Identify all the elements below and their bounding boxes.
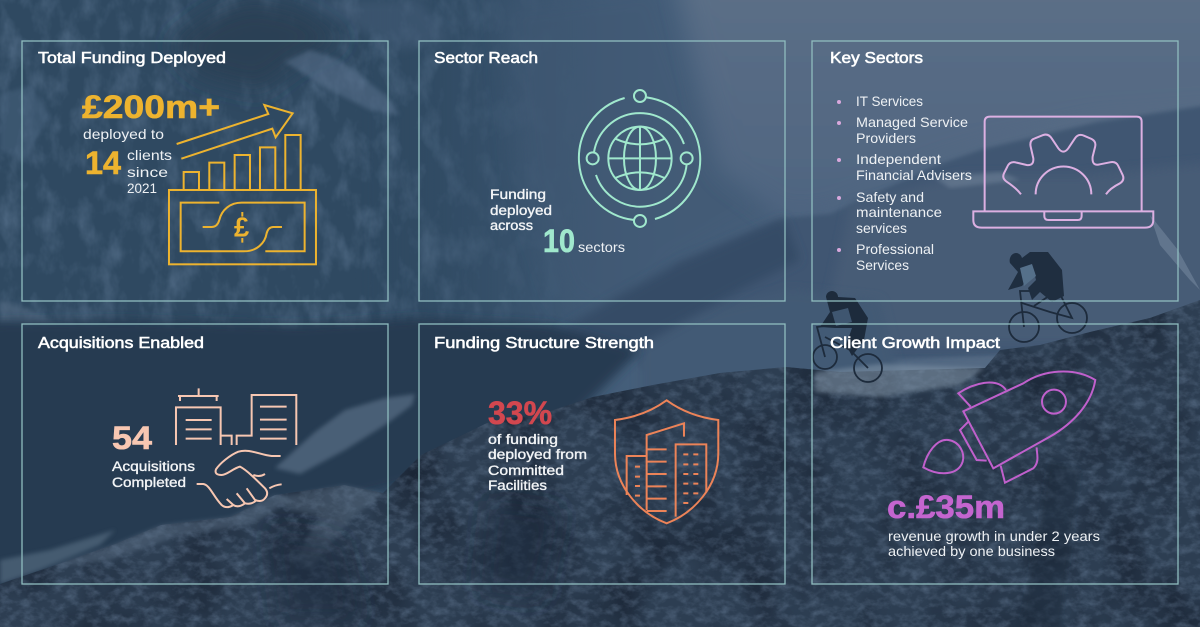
heading: Acquisitions Enabled xyxy=(38,335,204,352)
text: of funding deployed from committed facilities: Committed xyxy=(488,463,564,478)
rock ridge xyxy=(0,300,1200,627)
panel: acquisitions enabled xyxy=(22,324,388,584)
text: of funding deployed from committed facilities: of funding xyxy=(488,432,558,447)
icon: globe with orbits xyxy=(579,90,700,227)
panel: funding structure strength xyxy=(419,324,785,584)
text: funding deployed across: across xyxy=(490,218,533,233)
heading: Key Sectors xyxy=(830,50,923,67)
icon: money with rising bars and arrow: £ xyxy=(234,212,249,243)
icon: rocket xyxy=(923,372,1095,483)
panel: client growth impact xyxy=(812,324,1178,584)
text: deployed to: deployed to xyxy=(83,126,164,142)
sector list: Providers xyxy=(856,130,916,146)
text: clients since 2021: since xyxy=(127,164,168,180)
text: acquisitions completed xyxy=(112,459,195,490)
cyclist right xyxy=(1008,252,1087,342)
lower valley xyxy=(0,318,640,600)
text: funding deployed across: Funding xyxy=(490,187,546,202)
text: revenue growth xyxy=(888,528,1100,559)
sector list: Professional xyxy=(856,241,934,257)
heading: Total Funding Deployed xyxy=(38,50,226,67)
panel: total funding deployed xyxy=(22,41,388,301)
text: revenue growth: achieved by one business xyxy=(888,543,1055,559)
sector list: Independent xyxy=(856,151,941,167)
cyclist left xyxy=(813,291,882,382)
icon: shield with buildings xyxy=(615,400,718,523)
text: of funding deployed from committed facilities: Facilities xyxy=(488,478,547,493)
text: acquisitions completed: Acquisitions xyxy=(112,459,195,474)
icon: laptop with gear xyxy=(973,117,1153,228)
sector list: maintenance xyxy=(856,204,942,220)
text: revenue growth: revenue growth in under 2 years xyxy=(888,528,1100,544)
heading: Sector Reach xyxy=(434,50,538,67)
text: clients since 2021: clients xyxy=(127,147,172,163)
text: clients since 2021: 2021 xyxy=(127,180,157,196)
upper-left mountain face xyxy=(0,0,499,323)
heading: Funding Structure Strength xyxy=(434,335,654,352)
text: acquisitions completed: Completed xyxy=(112,475,186,490)
sector list: Safety and xyxy=(856,189,924,205)
sector list: Financial Advisers xyxy=(856,167,972,183)
text: sectors: sectors xyxy=(578,239,625,255)
sector list xyxy=(837,93,972,273)
stat: 54: 54 xyxy=(112,420,152,456)
icon: buildings and handshake xyxy=(176,388,296,507)
stat: 10: 10 xyxy=(543,223,575,259)
sector list: Managed Service xyxy=(856,114,968,130)
icon: money with rising bars and arrow xyxy=(169,105,316,264)
sector list: services xyxy=(856,220,907,236)
sector list: IT Services xyxy=(856,93,923,109)
text: funding deployed across xyxy=(490,187,552,233)
text: clients since 2021 xyxy=(127,147,172,196)
stat: 14: 14 xyxy=(85,145,121,181)
sector list: Services xyxy=(856,257,909,273)
mid ridge xyxy=(730,106,1200,360)
stat: £200m+: £200m+ xyxy=(82,89,220,125)
panel: sector reach xyxy=(419,41,785,301)
text: of funding deployed from committed facilities xyxy=(488,432,587,493)
text: funding deployed across: deployed xyxy=(490,203,552,218)
far mountains xyxy=(680,0,978,188)
heading: Client Growth Impact xyxy=(830,335,1001,352)
text: of funding deployed from committed facilities: deployed from xyxy=(488,447,587,462)
panel: key sectors xyxy=(812,41,1178,301)
stat: 33%: 33% xyxy=(488,395,552,431)
stat: c.£35m: c.£35m xyxy=(887,489,1005,525)
